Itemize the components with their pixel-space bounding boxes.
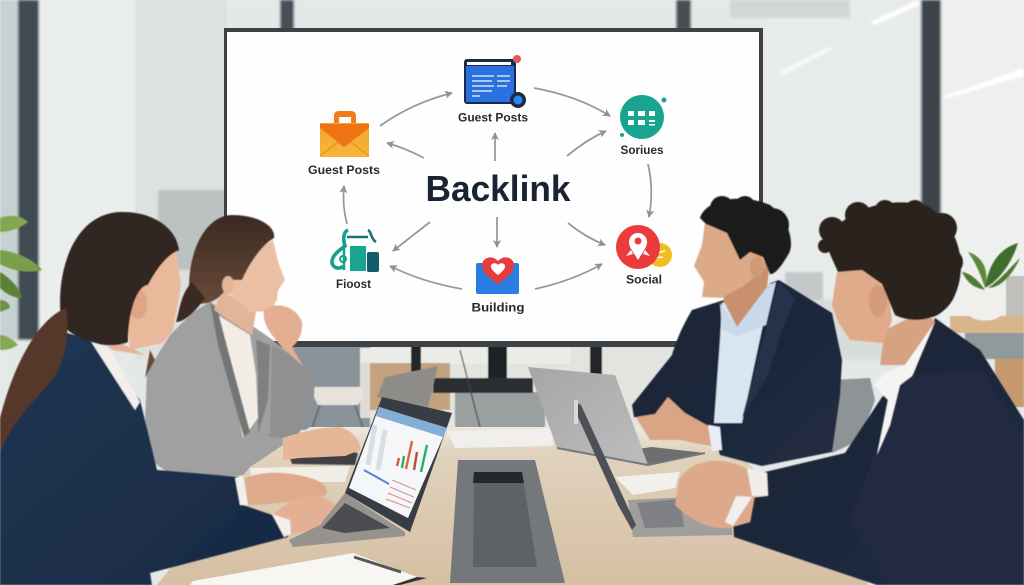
- label: social: Social: [626, 272, 662, 286]
- front right laptop: [574, 400, 732, 537]
- face: [126, 250, 181, 350]
- hands and cuffs: [675, 461, 762, 528]
- hair: [189, 215, 274, 305]
- front left laptop: [289, 397, 452, 547]
- label: guest posts top: Guest Posts: [458, 110, 528, 124]
- shirt: [714, 283, 770, 423]
- table: [157, 427, 869, 585]
- hair: [60, 212, 179, 345]
- hand of woman in gray: [283, 427, 360, 460]
- label: building: Building: [472, 300, 524, 314]
- chair behind man: [826, 378, 875, 453]
- central title: Backlink: [426, 168, 571, 209]
- icon: teal services circle: [620, 95, 666, 139]
- blouse: [213, 312, 258, 438]
- laptop rear left: [290, 366, 438, 465]
- laptop charts: [397, 441, 427, 472]
- area beneath the screen: stand, cabinet and chair: [230, 345, 680, 435]
- icon: envelope briefcase: [320, 111, 369, 157]
- icon: heart mail: [476, 257, 519, 294]
- cycle arrows: [343, 88, 651, 289]
- hand on chin: [264, 306, 303, 366]
- cable tray: [450, 460, 565, 583]
- icon: browser window: [464, 55, 526, 108]
- hand and cuff: [636, 397, 714, 447]
- papers: [447, 428, 553, 448]
- presentation screen: [224, 28, 763, 347]
- laptop of man at right: [528, 367, 705, 465]
- curly hair: [818, 200, 963, 320]
- ponytail: [0, 308, 68, 452]
- icon: teal bottles: [332, 230, 379, 272]
- person: woman in gray blazer: [145, 215, 316, 476]
- right plant and side desk: [950, 243, 1024, 407]
- label: guest posts left: Guest Posts: [308, 163, 380, 177]
- shirt and neck: [90, 340, 140, 410]
- label: fioost: Fioost: [336, 277, 371, 291]
- label: soriues: Soriues: [620, 143, 664, 157]
- neck and face: [723, 262, 770, 327]
- person: man at right of the screen: [632, 196, 842, 466]
- shirt: [874, 322, 935, 455]
- person: man in the foreground: [675, 200, 1024, 585]
- person: woman in navy jacket: [0, 212, 345, 585]
- sleeves and hands: [235, 476, 248, 505]
- left plant: [0, 216, 42, 350]
- icon: social location pin: [616, 225, 672, 269]
- neck and face: [214, 290, 256, 335]
- neck and face: [880, 310, 935, 365]
- hair: [700, 196, 791, 274]
